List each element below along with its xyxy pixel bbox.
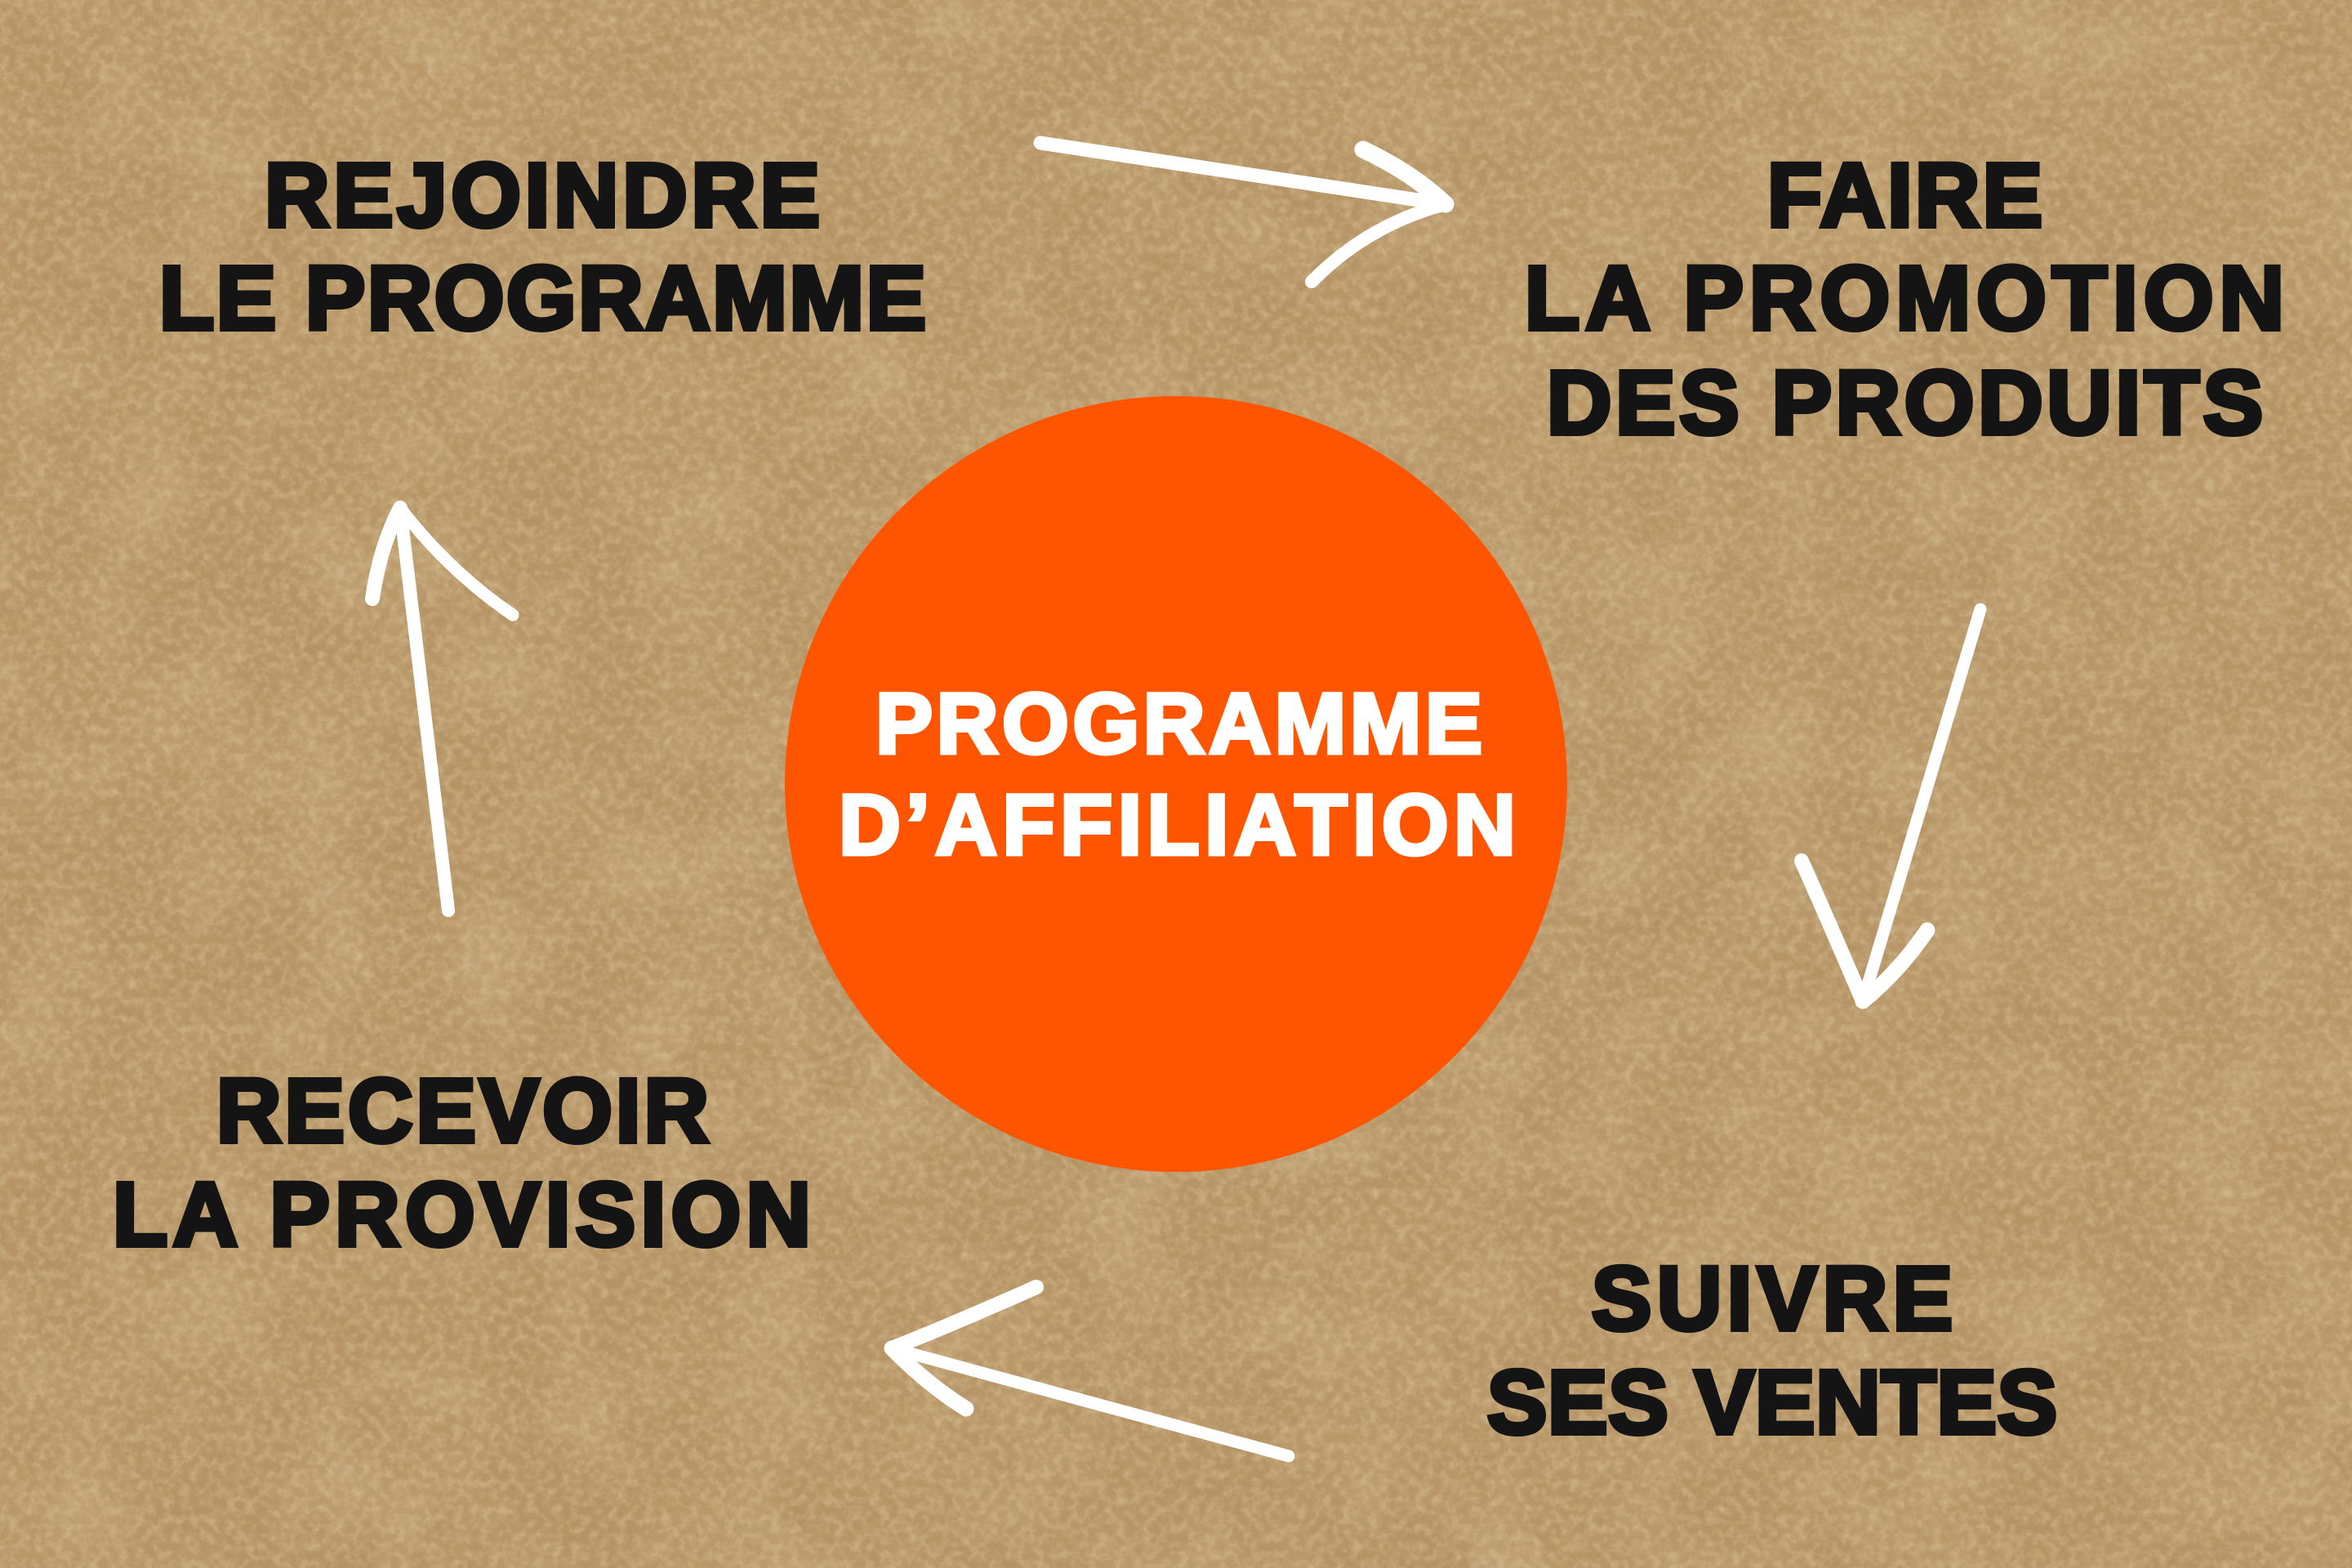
step: faire la promotion des produits: DES PRODUITS — [1547, 353, 2263, 453]
arrow: top, pointing right — [1040, 143, 1446, 282]
step: suivre ses ventes — [1487, 1249, 2057, 1453]
step: suivre ses ventes: SUIVRE — [1592, 1249, 1953, 1349]
central title — [839, 676, 1516, 873]
step: rejoindre le programme — [159, 145, 926, 349]
central title: PROGRAMME — [875, 676, 1482, 772]
step: faire la promotion des produits — [1525, 145, 2284, 453]
step: rejoindre le programme: REJOINDRE — [265, 145, 820, 246]
central orange circle — [785, 396, 1567, 1172]
step: faire la promotion des produits: FAIRE — [1767, 145, 2042, 246]
step: recevoir la provision: RECEVOIR — [216, 1061, 709, 1161]
step: rejoindre le programme: LE PROGRAMME — [159, 248, 926, 349]
step: faire la promotion des produits: LA PROMOTION — [1525, 248, 2284, 349]
step: suivre ses ventes: SES VENTES — [1487, 1352, 2057, 1453]
arrow: left, pointing up — [372, 508, 513, 911]
step: recevoir la provision: LA PROVISION — [113, 1165, 811, 1265]
step: recevoir la provision — [113, 1061, 811, 1265]
arrow: bottom, pointing left — [892, 1287, 1289, 1456]
central title: D’AFFILIATION — [839, 777, 1516, 873]
arrow: right, pointing down — [1802, 609, 1980, 1001]
